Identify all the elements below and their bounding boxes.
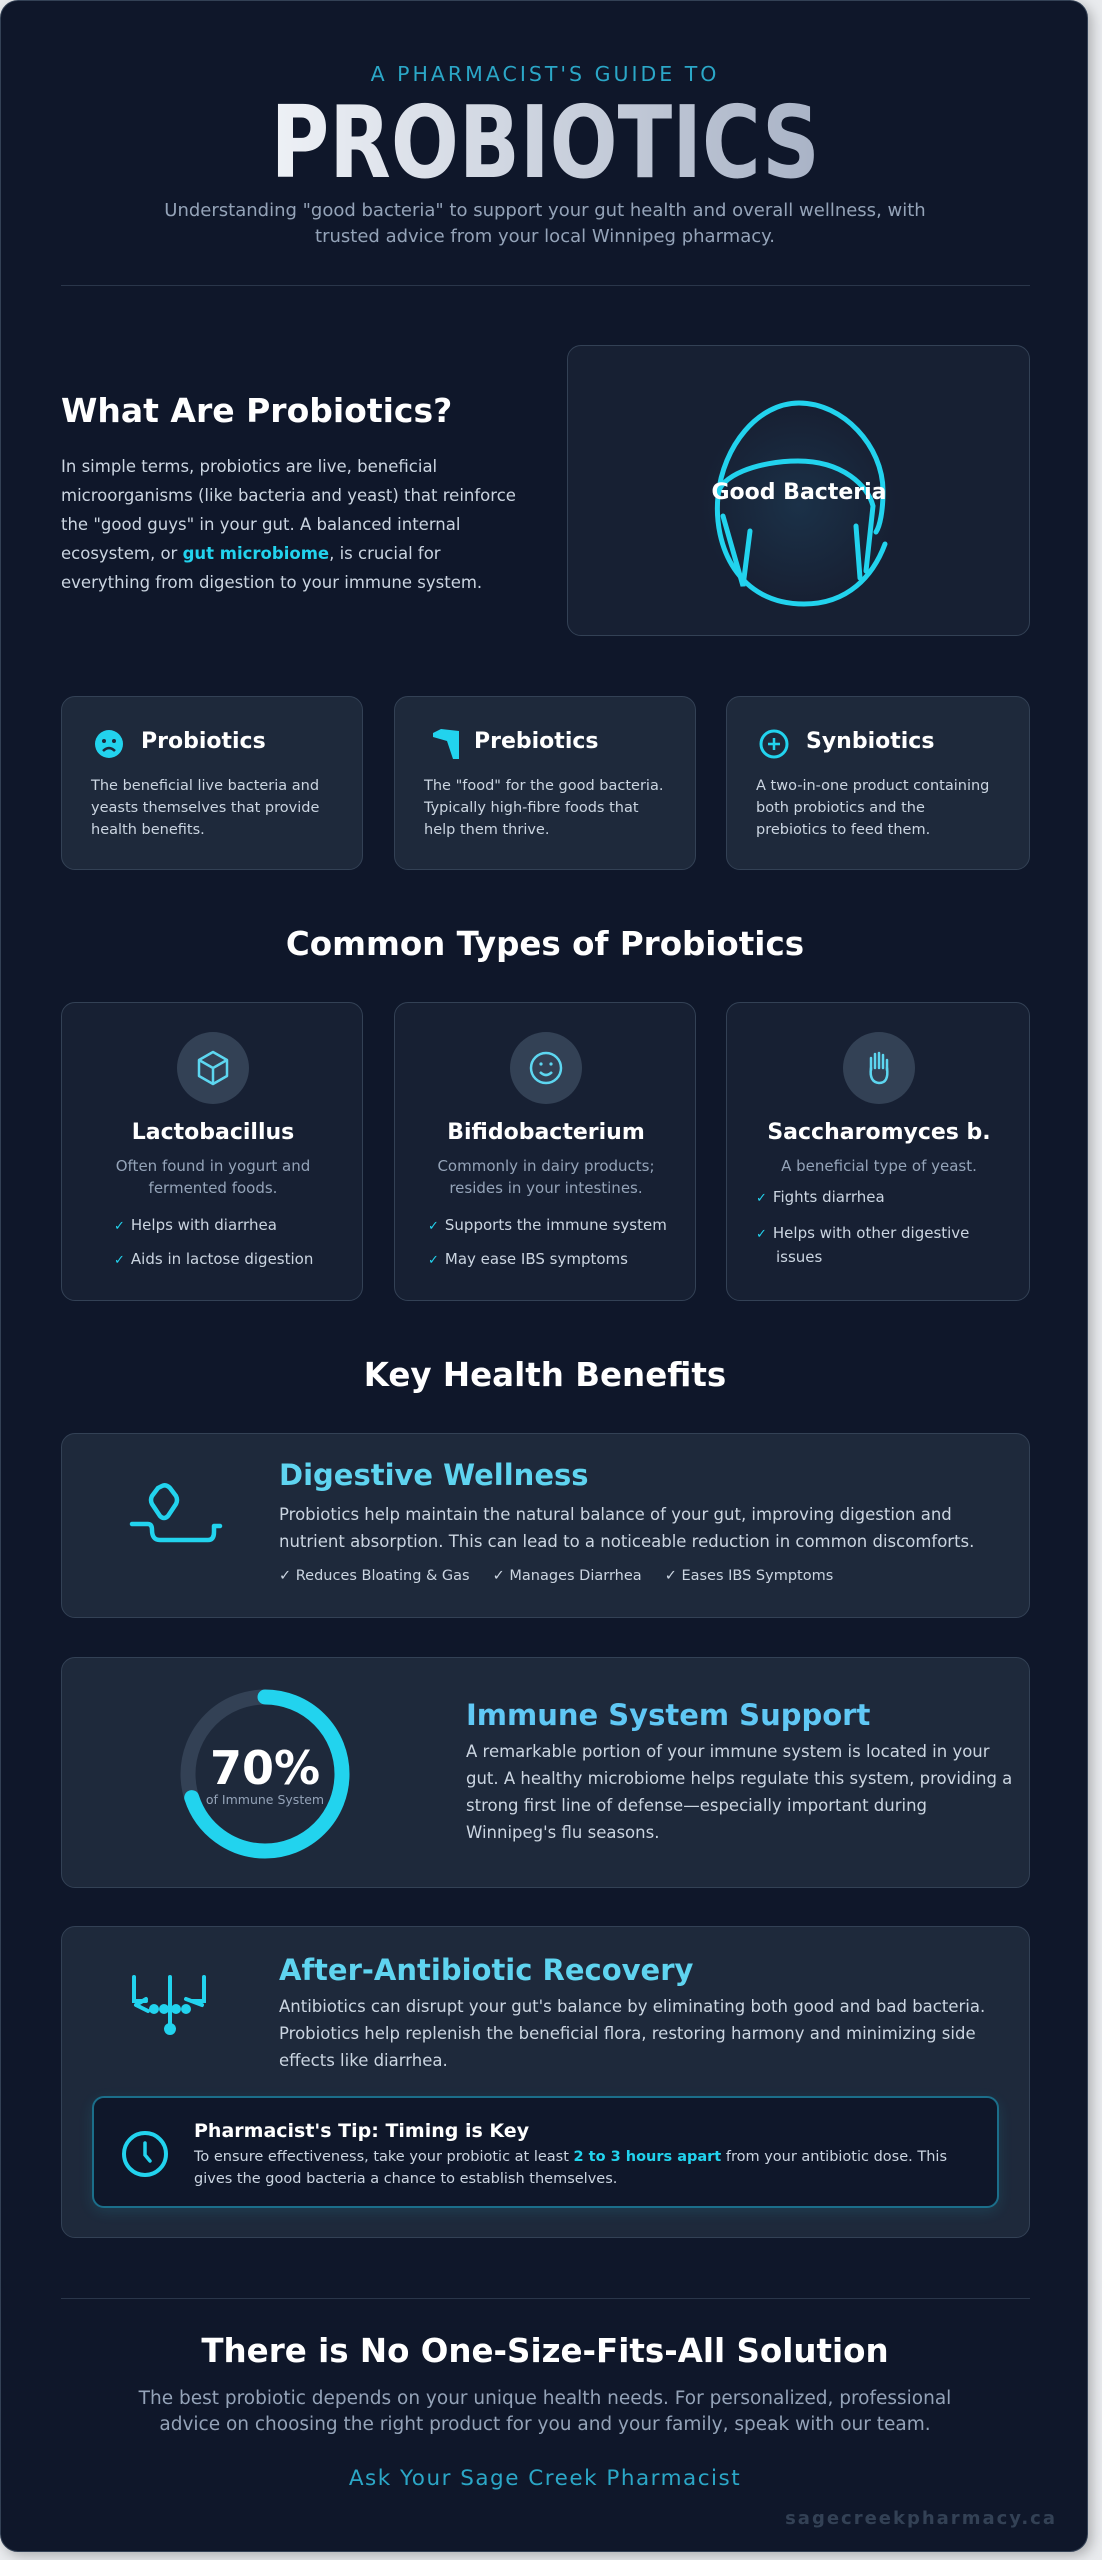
callout: pharmacist tip — [92, 2096, 999, 2208]
description: resides in your intestines. — [449, 1179, 643, 1197]
subtitle: trusted advice from your local Winnipeg pharmacy. — [315, 226, 775, 247]
title: Lactobacillus — [132, 1120, 294, 1145]
card: synbiotics — [726, 696, 1030, 870]
title: Saccharomyces b. — [767, 1120, 991, 1145]
subtitle: Understanding "good bacteria" to support your gut health and overall wellness, with — [164, 200, 926, 221]
type card: lactobacillus — [61, 1002, 363, 1301]
icon: leaf shape — [433, 729, 459, 759]
checks: ✓ Reduces Bloating & Gas ✓ Manages Diarrhea ✓ Eases IBS Symptoms — [279, 1568, 833, 1584]
icon: sad face — [95, 730, 123, 758]
title: Bifidobacterium — [447, 1120, 645, 1145]
checklist — [756, 1188, 969, 1266]
closing text: advice on choosing the right product for you and your family, speak with our team. — [159, 2414, 931, 2435]
checklist: ✓ Helps with other digestive issues — [756, 1224, 969, 1266]
icon: smile — [510, 1032, 582, 1104]
text: A two-in-one product containing both probiotics and the prebiotics to feed them. — [756, 778, 989, 838]
checklist: ✓ Helps with diarrhea — [114, 1216, 277, 1234]
chart: 70% donut: 70% — [210, 1741, 320, 1795]
title: Synbiotics — [806, 729, 934, 754]
checklist: ✓ May ease IBS symptoms — [428, 1250, 628, 1268]
card: probiotics — [61, 696, 363, 870]
title: Prebiotics — [474, 729, 598, 754]
title: Probiotics — [141, 729, 266, 754]
benefit: immune system — [61, 1657, 1030, 1888]
benefit: digestive wellness — [61, 1433, 1030, 1618]
checklist — [114, 1216, 313, 1268]
title: Digestive Wellness — [279, 1458, 589, 1492]
text: Probiotics help maintain the natural balance of your gut, improving digestion and nutrient absorption. This can lead to a noticeable reduction in common discomforts. — [279, 1505, 974, 1551]
closing text: The best probiotic depends on your unique health needs. For personalized, professional — [139, 2388, 951, 2409]
icon: stomach — [130, 1483, 222, 1542]
text: Antibiotics can disrupt your gut's balance by eliminating both good and bad bacteria. Probiotics help replenish the beneficial flora, restoring harmony and minimizing side effects like diarrhea. — [279, 1997, 985, 2070]
call to action: Ask Your Sage Creek Pharmacist — [349, 2466, 741, 2491]
type card: saccharomyces — [726, 1002, 1030, 1301]
title: Immune System Support — [466, 1698, 870, 1732]
checklist: ✓ Fights diarrhea — [756, 1188, 885, 1206]
checklist: ✓ Supports the immune system — [428, 1216, 667, 1234]
heading: what are probiotics: What Are Probiotics? — [61, 391, 452, 430]
card: prebiotics — [394, 696, 696, 870]
icon: hand — [843, 1032, 915, 1104]
checklist — [428, 1216, 667, 1268]
icon: recovery — [132, 1975, 206, 2035]
intro paragraph: In simple terms, probiotics are live, beneficial microorganisms (like bacteria and yeast) that reinforce the "good guys" in your gut. A balanced internal ecosystem, or gut microbiome, is crucial for everything from digestion to your immune system. — [61, 457, 516, 592]
title: PROBIOTICS — [270, 84, 820, 201]
description — [437, 1157, 655, 1197]
subtitle — [164, 200, 926, 247]
chart: 70% donut — [180, 1690, 350, 1858]
description: Commonly in dairy products; — [437, 1157, 655, 1175]
icon: clock — [122, 2131, 168, 2177]
heading: no one-size: There is No One-Size-Fits-All Solution — [201, 2332, 889, 2370]
description: fermented foods. — [149, 1179, 277, 1197]
label: Good Bacteria — [711, 480, 887, 505]
title: After-Antibiotic Recovery — [279, 1953, 693, 1987]
tip text: To ensure effectiveness, take your probiotic at least 2 to 3 hours apart from your antibiotic dose. This gives the good bacteria a chance to establish themselves. — [194, 2149, 947, 2187]
panel: good bacteria illustration — [567, 345, 1030, 636]
description — [116, 1157, 310, 1197]
type card: bifidobacterium — [394, 1002, 696, 1301]
description: Often found in yogurt and — [116, 1157, 310, 1175]
description: A beneficial type of yeast. — [781, 1157, 977, 1175]
icon: plus circle — [760, 730, 788, 758]
checklist: ✓ Aids in lactose digestion — [114, 1250, 313, 1268]
icon: cube — [177, 1032, 249, 1104]
icon: bacteria — [717, 403, 885, 604]
benefit: after-antibiotic recovery — [61, 1926, 1030, 2238]
kicker: A PHARMACIST'S GUIDE TO — [371, 62, 719, 86]
closing text — [138, 2388, 951, 2435]
text: A remarkable portion of your immune system is located in your gut. A healthy microbiome helps regulate this system, providing a strong first line of defense—especially important during Winnipeg's flu seasons. — [466, 1742, 1012, 1842]
chart: 70% donut: of Immune System — [206, 1792, 324, 1807]
text: The beneficial live bacteria and yeasts themselves that provide health benefits. — [91, 778, 319, 838]
text: The "food" for the good bacteria. Typically high-fibre foods that help them thrive. — [424, 778, 663, 838]
heading: common types: Common Types of Probiotics — [286, 925, 804, 963]
heading: key health benefits: Key Health Benefits — [364, 1356, 726, 1394]
website: sagecreekpharmacy.ca — [785, 2508, 1057, 2529]
tip title: Pharmacist's Tip: Timing is Key — [194, 2120, 529, 2142]
